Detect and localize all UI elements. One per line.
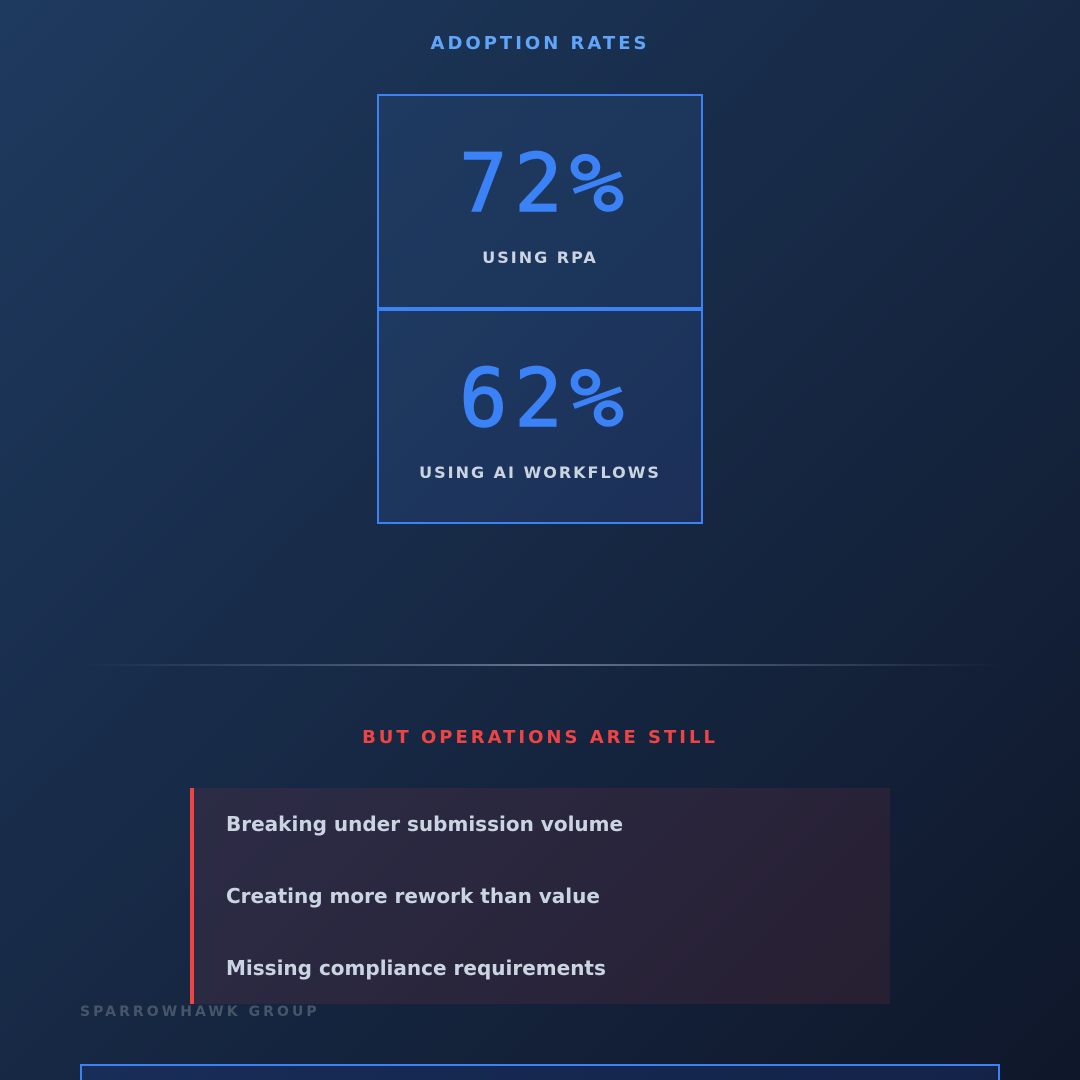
list item: breaking under submission volume: Breaking under submission volume	[226, 812, 623, 836]
panel: stat 62% using AI workflows	[377, 309, 703, 524]
stat label: using AI workflows: USING AI WORKFLOWS	[419, 463, 661, 482]
list item: missing compliance requirements: Missing compliance requirements	[226, 956, 606, 980]
stat number: 72%	[459, 137, 631, 230]
heading: but operations are still: BUT OPERATIONS ARE STILL	[362, 727, 718, 748]
stat number: 72%: %	[570, 137, 631, 230]
stat number: 62%: 62	[459, 352, 570, 445]
list item: creating more rework than value: Creating more rework than value	[226, 884, 600, 908]
stat number: 62%	[459, 352, 631, 445]
footer brand: Sparrowhawk Group: SPARROWHAWK GROUP	[80, 1004, 320, 1020]
panel: problem list	[190, 788, 890, 1004]
panel: stat 72% using RPA	[377, 94, 703, 309]
stat number: 62%: %	[570, 352, 631, 445]
stat label: using RPA: USING RPA	[482, 248, 598, 267]
stat number: 72%: 72	[459, 137, 570, 230]
panel: bottom callout box, cut off by page edge	[80, 1064, 1000, 1080]
heading: adoption rates: ADOPTION RATES	[431, 33, 649, 54]
